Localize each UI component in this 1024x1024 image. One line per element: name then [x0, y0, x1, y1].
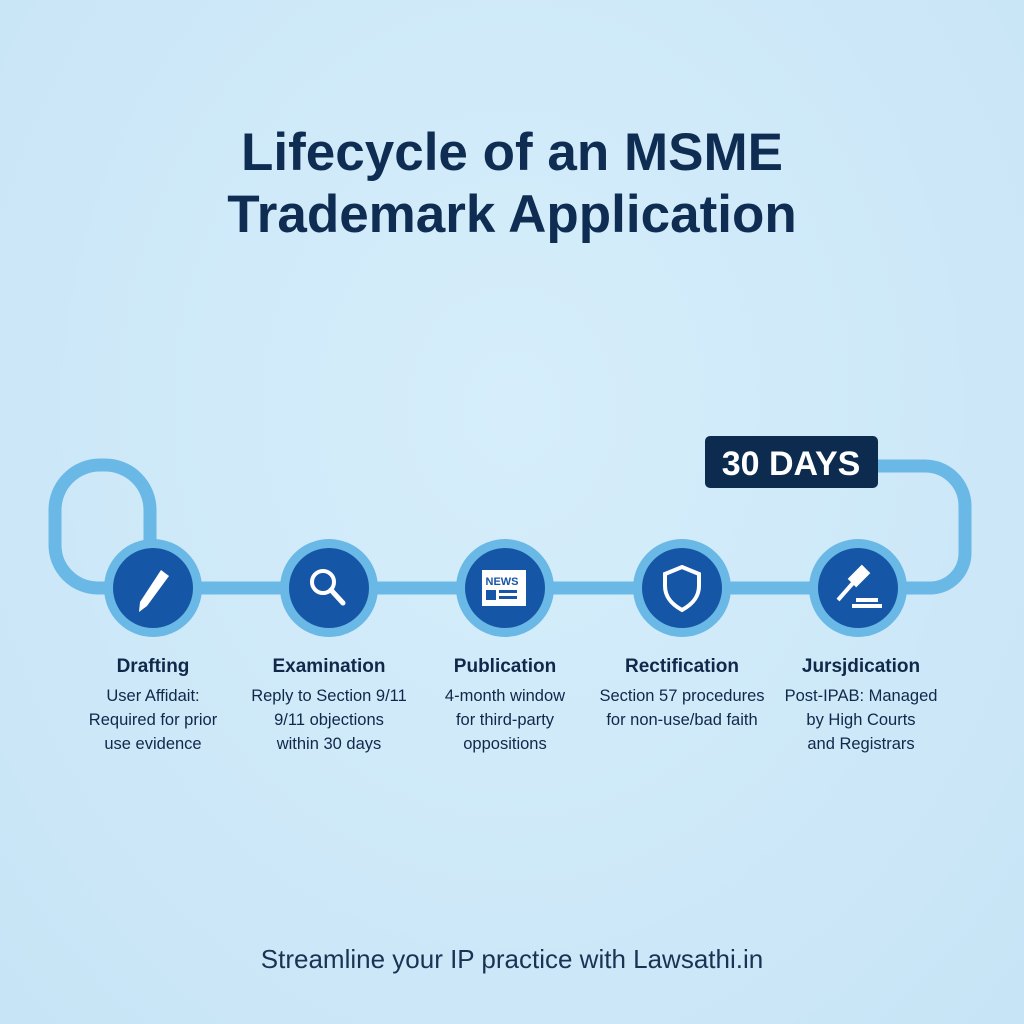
- step: rectification: Rectification: [625, 656, 739, 677]
- icon: magnifier: [280, 539, 378, 637]
- step: rectification: for non-use/bad faith: [606, 711, 758, 729]
- title: Trademark Application: [227, 185, 797, 244]
- icon: gavel: [809, 539, 907, 637]
- footer: Streamline your IP practice with Lawsathi.in: [261, 944, 763, 974]
- badge: 30 days: 30 DAYS: [722, 445, 860, 483]
- step: examination: within 30 days: [277, 735, 381, 753]
- step: publication: [445, 656, 566, 753]
- step: jurisdiction: by High Courts: [806, 711, 916, 729]
- step: examination: Reply to Section 9/11: [251, 687, 407, 705]
- title: Lifecycle of an MSME: [241, 123, 783, 182]
- step: examination: [251, 656, 407, 753]
- step: jurisdiction: Jursjdication: [802, 656, 920, 677]
- step: jurisdiction: [785, 656, 937, 753]
- icon: shield: [633, 539, 731, 637]
- step: drafting: use evidence: [104, 735, 202, 753]
- icon: newspaper: NEWS: [486, 576, 518, 588]
- connector path: [55, 465, 965, 588]
- icon: newspaper: [456, 539, 554, 637]
- step: jurisdiction: Post-IPAB: Managed: [785, 687, 937, 705]
- step: publication: for third-party: [456, 711, 554, 729]
- step: publication: oppositions: [463, 735, 547, 753]
- step: drafting: Required for prior: [89, 711, 217, 729]
- step: examination: 9/11 objections: [274, 711, 384, 729]
- step: publication: Publication: [454, 656, 556, 677]
- step: jurisdiction: and Registrars: [807, 735, 915, 753]
- step: drafting: [89, 656, 217, 753]
- title: [227, 123, 797, 244]
- step: rectification: [599, 656, 765, 729]
- icon: drafting pen: [104, 539, 202, 637]
- step: drafting: User Affidait:: [106, 687, 200, 705]
- step: examination: Examination: [272, 656, 385, 677]
- step: drafting: Drafting: [117, 656, 189, 677]
- step: publication: 4-month window: [445, 687, 565, 705]
- badge: 30 days: [705, 436, 878, 488]
- step: rectification: Section 57 procedures: [599, 687, 765, 705]
